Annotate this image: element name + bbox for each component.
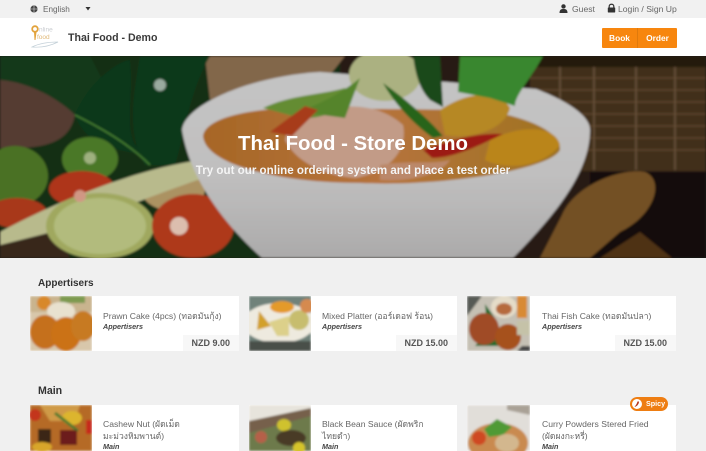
hero subtitle: Try out our online ordering system and place a test order xyxy=(196,164,510,177)
order button label: Order xyxy=(646,33,669,43)
item name: Prawn Cake (4pcs) (ทอดมันกุ้ง) xyxy=(103,311,222,321)
icon: padlock xyxy=(608,4,616,12)
spicy badge xyxy=(630,397,668,411)
price tag: NZD 9.00 xyxy=(191,338,230,348)
top utility bar xyxy=(0,0,706,18)
card: mixed platter xyxy=(249,296,457,351)
item name: Thai Fish Cake (ทอดมันปลา) xyxy=(542,311,651,321)
item name: Cashew Nut (ผัดเม็ด xyxy=(103,419,180,429)
wooden spoon xyxy=(540,171,655,258)
photo: curry powders xyxy=(467,405,530,451)
navigation bar xyxy=(0,18,706,56)
hero title: Thai Food - Store Demo xyxy=(238,133,468,155)
icon: dropdown caret xyxy=(86,7,90,10)
hero food photo illustration xyxy=(0,56,706,258)
hero banner xyxy=(0,56,706,258)
item name: มะม่วงหิมพานต์) xyxy=(103,431,164,441)
price tag: NZD 15.00 xyxy=(404,338,448,348)
item name: (ผัดผงกะหรี่) xyxy=(542,431,588,441)
logo xyxy=(31,25,58,48)
icon: globe xyxy=(30,5,38,13)
lime slice and peppers xyxy=(349,49,421,101)
item category: Appertisers xyxy=(103,322,143,331)
section heading: main: Main xyxy=(38,385,62,397)
item name xyxy=(103,418,180,441)
icon: guest user xyxy=(560,4,568,13)
item name: ไทยดำ) xyxy=(322,431,350,441)
card: thai fish cake xyxy=(467,296,676,351)
item name xyxy=(322,419,424,441)
store name: Thai Food - Demo xyxy=(68,32,157,44)
book button label: Book xyxy=(609,33,630,43)
photo: black bean sauce xyxy=(249,405,311,451)
price tag: NZD 15.00 xyxy=(623,338,667,348)
item category: Main xyxy=(322,442,338,451)
darkening overlay xyxy=(0,56,706,258)
icon: chili xyxy=(632,399,642,409)
login link: Login / Sign Up xyxy=(618,4,677,14)
item name: Curry Powders Stered Fried xyxy=(542,419,649,429)
item category: Main xyxy=(103,442,119,451)
table background xyxy=(0,56,706,258)
item name xyxy=(542,419,649,441)
logo: food xyxy=(37,34,50,41)
item category: Main xyxy=(542,442,558,451)
photo: cashew nut xyxy=(30,405,92,451)
highlights xyxy=(84,152,96,164)
language selector: English xyxy=(43,5,70,14)
card: prawn cake xyxy=(30,296,239,351)
card: curry powders stir fried xyxy=(467,405,676,451)
limes and tomatoes xyxy=(62,137,118,181)
price tag xyxy=(396,335,457,351)
photo: prawn cake xyxy=(30,296,92,351)
soup xyxy=(203,108,560,184)
card: cashew nut xyxy=(30,405,239,451)
badge label: Spicy xyxy=(646,399,665,408)
book and order buttons xyxy=(602,28,677,48)
photo: thai fish cake xyxy=(467,296,530,351)
item category: Appertisers xyxy=(542,322,582,331)
photo: mixed platter xyxy=(249,296,311,351)
price tag xyxy=(183,335,239,351)
item name: Black Bean Sauce (ผัดพริก xyxy=(322,419,424,429)
item category: Appertisers xyxy=(322,322,362,331)
bowl xyxy=(182,72,590,258)
leaves and herbs xyxy=(0,56,110,115)
book button label xyxy=(602,28,638,48)
card: black bean sauce xyxy=(249,405,457,451)
section heading: appetisers: Appertisers xyxy=(38,278,94,289)
item name: Mixed Platter (ออร์เดอฟ ร้อน) xyxy=(322,311,433,321)
guest label: Guest xyxy=(572,4,595,14)
prawns xyxy=(285,106,404,178)
logo: nline xyxy=(39,26,53,34)
wicker mat xyxy=(530,66,706,171)
price tag xyxy=(615,335,676,351)
